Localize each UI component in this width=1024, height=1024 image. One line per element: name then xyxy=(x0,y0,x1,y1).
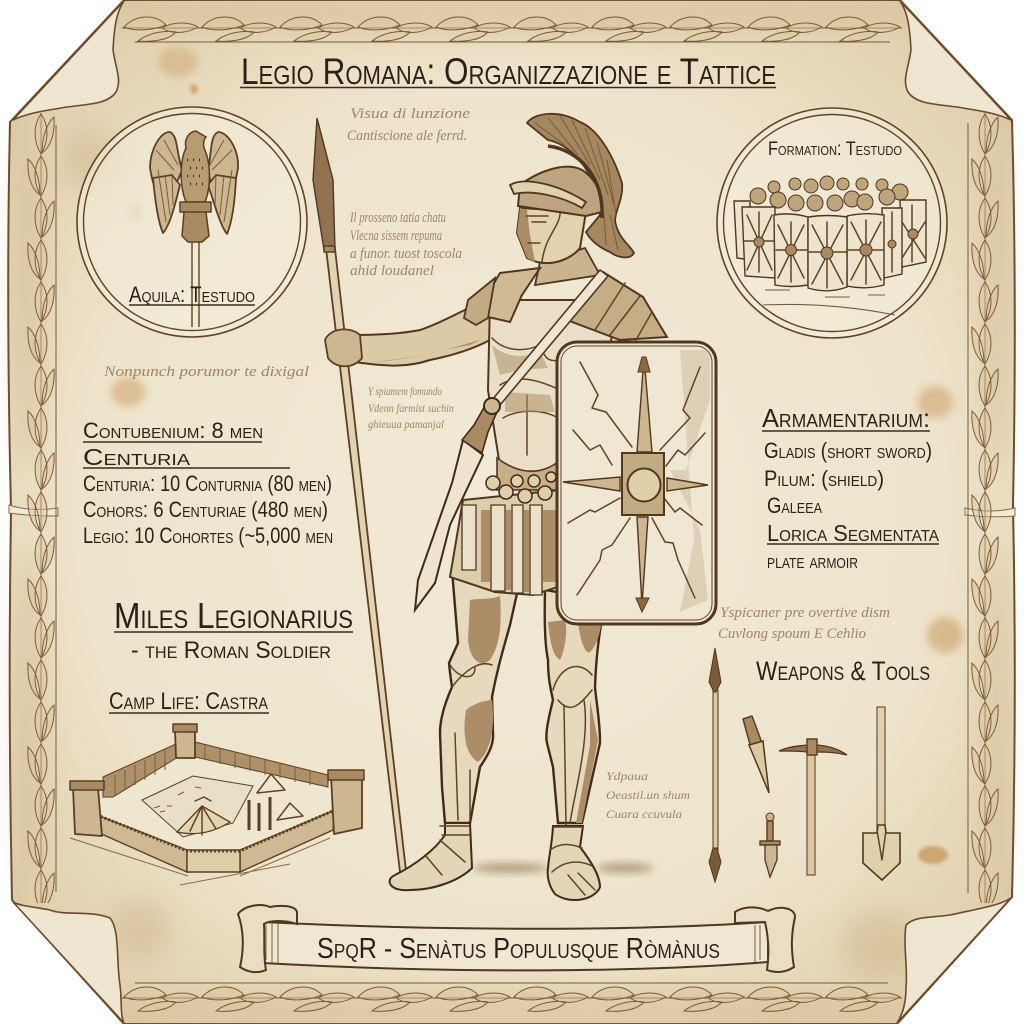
laurel border: right xyxy=(968,113,1000,903)
left leg muscles xyxy=(464,596,501,762)
belt and studs xyxy=(486,458,558,503)
text block: armamentarium: Gladis (short sword) xyxy=(764,438,932,463)
icon: dagger xyxy=(743,716,769,793)
handwritten notes: Vlecna sissem repuma xyxy=(350,228,442,244)
ground shadow xyxy=(472,863,653,873)
text block: unit organization: Centuria xyxy=(83,444,190,470)
corner fold: bottom left xyxy=(13,902,124,1023)
laurel border: left xyxy=(26,113,56,903)
text block: unit organization: Cohors: 6 Centuriae (480 men) xyxy=(83,497,328,522)
hand xyxy=(325,329,362,366)
handwritten notes: ghieuua pamanjal xyxy=(368,417,445,431)
banner: SPQR xyxy=(238,905,795,972)
corner fold: top right xyxy=(900,1,1011,120)
panel: aquila medallion xyxy=(77,107,307,337)
handwritten notes: Yspicaner pre overtive dism xyxy=(720,605,890,621)
arm shading xyxy=(370,340,480,362)
text block: armamentarium: Armamentarium: xyxy=(762,403,930,433)
handwritten notes: Visua di lunzione xyxy=(350,106,470,122)
left sandal xyxy=(390,823,472,890)
panel: testudo medallion: Formation: Testudo xyxy=(768,139,902,160)
text block: armamentarium xyxy=(762,403,939,573)
text block: unit organization xyxy=(83,418,333,548)
heading: weapons and tools: Weapons & Tools xyxy=(756,656,930,686)
icon: pilum xyxy=(709,648,721,882)
heading: camp life: Camp Life: Castra xyxy=(109,688,269,715)
neck xyxy=(535,248,600,285)
handwritten notes xyxy=(103,106,890,821)
panel: aquila medallion: Aquila: Testudo xyxy=(129,282,255,307)
chest and abs xyxy=(492,338,560,455)
icon: shovel xyxy=(863,707,900,880)
shield xyxy=(557,342,716,624)
text block: armamentarium: Galeea xyxy=(767,493,822,518)
laurel border: bottom xyxy=(122,983,902,1013)
title: Legio Romana: Organizzazione e Tattice xyxy=(241,51,776,92)
illustration: roman camp xyxy=(70,724,364,885)
torso xyxy=(488,300,620,474)
text block: armamentarium: Pilum: (shield) xyxy=(764,466,884,491)
right leg xyxy=(545,590,605,823)
corner fold: top left xyxy=(13,1,124,120)
panel: testudo medallion xyxy=(717,108,947,338)
icon: eagle standard xyxy=(150,131,238,327)
handwritten notes: Cantiscione ale ferrd. xyxy=(347,128,467,144)
right pauldron xyxy=(567,272,667,340)
handwritten notes: Nonpunch porumor te dixigal xyxy=(103,364,309,380)
arm guard xyxy=(464,278,495,325)
handwritten notes: Ydpaua xyxy=(606,769,648,783)
right leg muscles xyxy=(548,620,602,823)
crest hatching xyxy=(535,116,618,250)
text block: unit organization: Centuria: 10 Conturnia (80 men) xyxy=(83,471,332,496)
handwritten notes: Il prosseno tatia chatu xyxy=(349,210,446,226)
spear xyxy=(313,118,406,872)
handwritten notes: ahid loudanel xyxy=(350,263,434,279)
handwritten notes: Oeastil.un shum xyxy=(606,788,690,802)
icon: pickaxe xyxy=(779,739,847,875)
handwritten notes: Vdenn farmist suchin xyxy=(368,401,454,415)
pteruges xyxy=(462,505,542,595)
handwritten notes: Cuvlong spoum E Cehlio xyxy=(718,626,866,642)
tunic skirt xyxy=(450,490,560,595)
heading: miles legionarius: Miles Legionarius xyxy=(114,595,353,636)
text block: armamentarium: Lorica Segmentata xyxy=(767,520,939,546)
illustration: legionary soldier xyxy=(325,114,667,900)
left pauldron xyxy=(488,268,540,322)
text block: unit organization: Legio: 10 Cohortes (~5,000 men xyxy=(83,523,333,548)
heading: miles legionarius: - the Roman Soldier xyxy=(131,637,331,664)
handwritten notes: a funor. tuost toscola xyxy=(350,246,462,262)
handwritten notes: Y spiamem fomundo xyxy=(368,384,442,398)
right sandal xyxy=(548,826,600,900)
face xyxy=(517,208,586,263)
shield boss xyxy=(622,453,664,515)
shield emblem xyxy=(568,362,705,598)
baldric strap xyxy=(492,270,608,405)
heading: miles legionarius xyxy=(114,595,353,664)
handwritten notes: Cuara ccuvula xyxy=(606,807,682,821)
banner: SPQR: SpqR - Senàtus Populusque Ròmànus xyxy=(317,933,720,965)
text block: unit organization: Contubenium: 8 men xyxy=(83,418,263,443)
sword xyxy=(415,440,483,610)
helmet xyxy=(518,167,602,216)
helmet crest xyxy=(527,114,634,257)
left leg xyxy=(440,570,520,823)
corner fold: bottom right xyxy=(897,898,1011,1023)
laurel border: top xyxy=(122,13,902,43)
icon: short sword xyxy=(760,813,780,877)
arm xyxy=(352,300,490,366)
text block: armamentarium: plate armoir xyxy=(767,548,858,573)
icon: testudo formation xyxy=(734,176,926,315)
